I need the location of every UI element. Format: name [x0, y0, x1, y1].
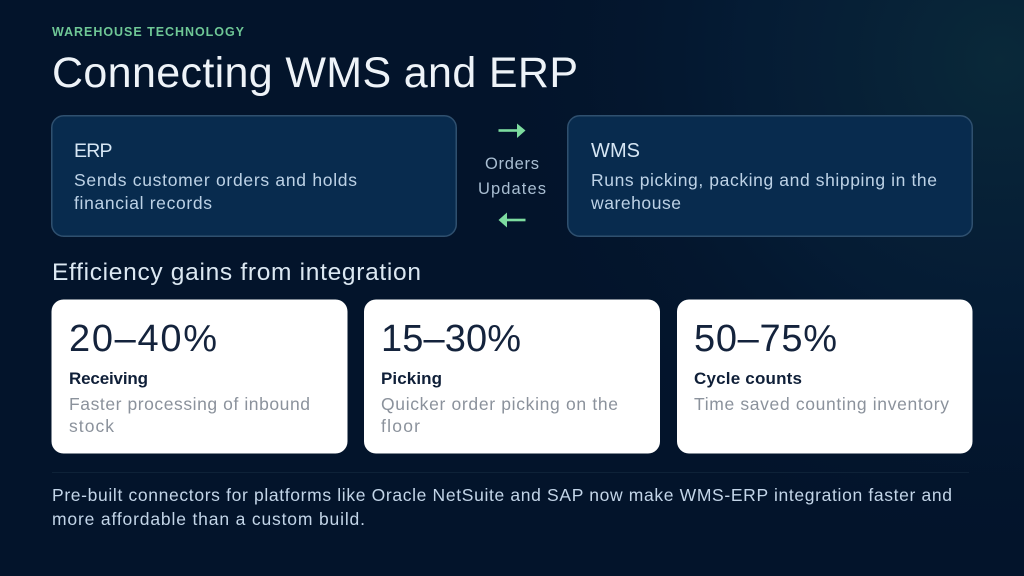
- card: receiving: [52, 300, 348, 454]
- arrow: orders to WMS: [498, 124, 526, 138]
- panel: WMS: [568, 116, 972, 236]
- description: Time saved counting inventory: [694, 394, 949, 414]
- stat: 50–75%: [694, 318, 837, 360]
- panel: ERP: [52, 116, 456, 236]
- connector labels: Updates: [478, 180, 546, 198]
- title: Connecting WMS and ERP: [52, 49, 578, 97]
- footer note: [52, 485, 952, 529]
- footer note: Pre-built connectors for platforms like Oracle NetSuite and SAP now make WMS-ERP integration faster and: [52, 485, 952, 505]
- connector labels: Orders: [485, 155, 539, 173]
- label: Cycle counts: [694, 369, 802, 388]
- ERP description: financial records: [74, 193, 212, 213]
- description: Quicker order picking on the: [381, 394, 618, 414]
- card: picking: [364, 300, 660, 454]
- eyebrow label: WAREHOUSE TECHNOLOGY: [52, 25, 245, 39]
- section heading: Efficiency gains from integration: [52, 259, 421, 286]
- stat: 20–40%: [69, 318, 217, 360]
- description: [381, 394, 618, 436]
- description: Faster processing of inbound: [69, 394, 310, 414]
- footer note: more affordable than a custom build.: [52, 509, 365, 529]
- description: stock: [69, 416, 114, 436]
- ERP heading: ERP: [74, 140, 112, 162]
- description: floor: [381, 416, 420, 436]
- WMS description: warehouse: [590, 193, 681, 213]
- arrow: updates to ERP: [498, 212, 526, 228]
- ERP description: Sends customer orders and holds: [74, 170, 357, 190]
- WMS heading: WMS: [591, 140, 640, 162]
- connector labels: [478, 155, 546, 198]
- label: Receiving: [69, 369, 148, 388]
- label: Picking: [381, 369, 442, 388]
- ERP description: [74, 170, 357, 213]
- description: [69, 394, 310, 436]
- stat: 15–30%: [381, 318, 521, 360]
- WMS description: Runs picking, packing and shipping in the: [591, 170, 937, 190]
- WMS description: [590, 170, 937, 213]
- card: cycle counts: [677, 300, 972, 454]
